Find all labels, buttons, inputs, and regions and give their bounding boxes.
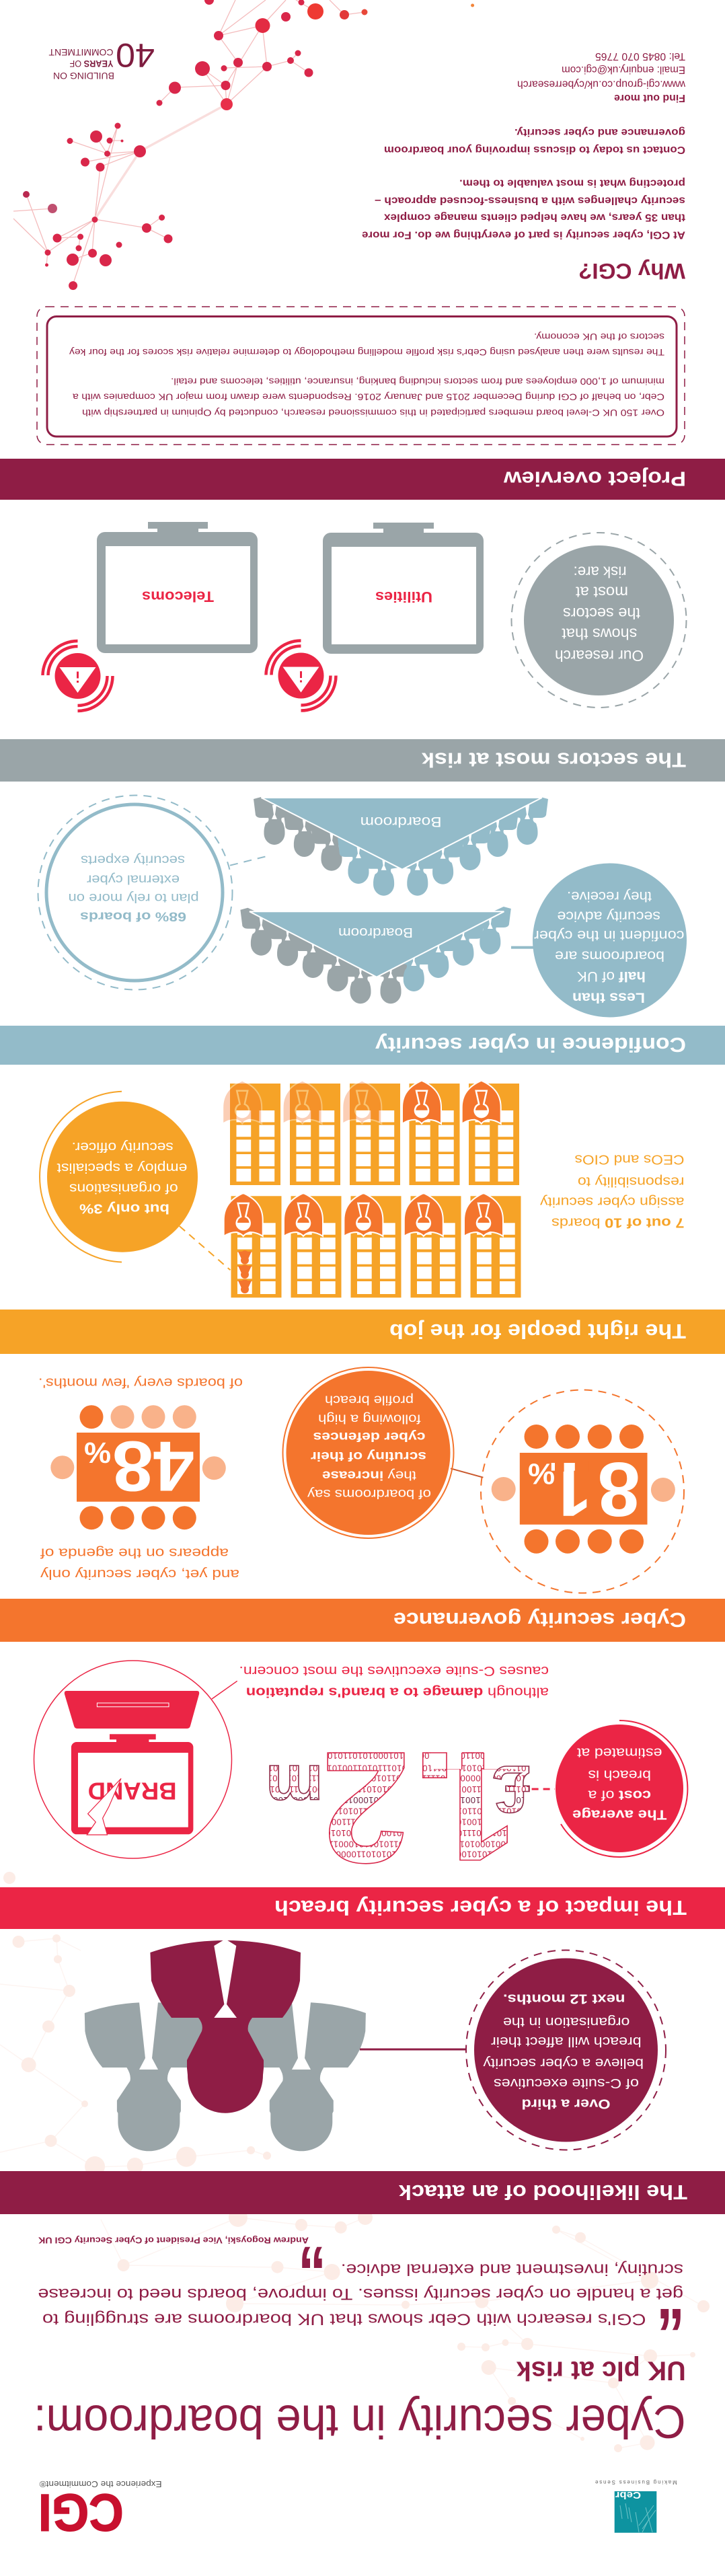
callout: but only 3%: but only 3%: [79, 1201, 169, 1216]
callout: over a third: Over a third: [522, 2096, 611, 2111]
panel: methodology box: sectors of the UK economy.: [534, 332, 664, 342]
contact details: Tel: 0845 070 7765: [595, 50, 685, 62]
stat: £1.2m binary figure: 2: [321, 1718, 410, 1896]
callout: boardrooms increase scrutiny: of boardrooms say: [307, 1486, 431, 1501]
stat: 81% boardroom table: 1: [549, 1446, 592, 1531]
stat: 81% boardroom table: %: [528, 1457, 555, 1490]
icon: boardroom table one: Boardroom: [360, 814, 442, 829]
icon: boardroom table two: Boardroom: [338, 925, 413, 940]
stat: 81% boardroom table: [481, 1390, 684, 1593]
callout: boardrooms increase scrutiny: they increase: [322, 1468, 416, 1482]
heading: why CGI: Why CGI?: [578, 259, 685, 283]
subtitle: UK plc at risk: [516, 2356, 686, 2386]
icon: brand monitor in circle: [34, 1661, 237, 1858]
40 years of commitment logo: 40: [116, 36, 155, 74]
panel: methodology box: Over 150 UK C-level board members participated in this commissioned research, conducted by Opinium in partnership with: [82, 408, 664, 418]
text: 7 out of 10 boards: responsibility to: [578, 1174, 685, 1189]
stat: £1.2m binary figure: 0110110101100101000111101010100100011100111010101011101000101010: [211, 1817, 531, 1827]
callout: but only 3%: security officer.: [72, 1139, 174, 1154]
stat: £1.2m binary figure: 1: [431, 1719, 518, 1893]
title: Cyber security in the boardroom:: [34, 2396, 686, 2448]
callout: average cost of a breach: [532, 1720, 687, 1857]
40 years of commitment logo: [48, 36, 155, 81]
section bar: the likelihood of an attack: The likelihood of an attack: [398, 2181, 687, 2204]
callout: average cost of a breach: cost of a: [587, 1787, 651, 1802]
logo: Cebr: [595, 2479, 677, 2533]
callout: 68% of boards: 68% of boards: [80, 909, 186, 923]
callout: 68% of boards: [38, 795, 270, 990]
callout: less than half: security advice: [557, 909, 660, 924]
section bar: project overview: [0, 459, 725, 500]
logo: Cebr: Cebr: [615, 2489, 641, 2501]
callout: less than half: Less than: [572, 990, 645, 1006]
callout: but only 3%: [40, 1092, 230, 1270]
stat: £1.2m binary figure: 0100110010000011001111000001101011100101001110101110101000111010: [212, 1773, 531, 1783]
why CGI text: security challenges with a business-focused approach –: [375, 195, 685, 206]
text: cyber security on the agenda: appears on the agenda of: [40, 1546, 229, 1560]
stat: £1.2m binary figure: £: [493, 1752, 530, 1827]
callout: over a third: believe a cyber security: [483, 2055, 644, 2070]
quote text: get a handle on cyber security issues. To improve, boards need to increase: [38, 2285, 683, 2303]
callout: but only 3%: of organisations: [69, 1181, 178, 1196]
callout: boardrooms increase scrutiny: following a high: [318, 1411, 421, 1425]
callout: sectors most at risk: the sectors: [563, 605, 640, 622]
why CGI text: protecting what is most valuable to them.: [459, 178, 685, 188]
text: 7 out of 10 boards: [540, 1152, 685, 1230]
text: damage to brand reputation: causes C-suite executives the most concern.: [239, 1663, 549, 1678]
icon: telecoms warning: [43, 641, 113, 711]
text: cyber security on the agenda: [38, 1375, 243, 1581]
icon: offices lower row: [224, 1193, 521, 1297]
panel: methodology box: The results were then analysed using Cebr's risk profile modelling methodology to determine relative risk scores for the four key: [69, 347, 664, 357]
callout: boardrooms increase scrutiny: scrutiny of their: [310, 1449, 426, 1463]
stat: £1.2m binary figure: 1000100100010101000000011011010110100011001111000111010010101011: [209, 1840, 531, 1850]
text: cyber security on the agenda: and yet, cyber security only: [40, 1566, 239, 1581]
stat: 48% boardroom table: %: [84, 1436, 111, 1469]
text: cyber security on the agenda: of boards every 'few months'.: [38, 1375, 243, 1390]
icon: offices upper row: [223, 1081, 519, 1185]
section bar: sectors most at risk: The sectors most at risk: [421, 748, 686, 772]
callout: less than half: they receive.: [567, 888, 652, 904]
text: 7 out of 10 boards: assign cyber security: [540, 1195, 685, 1209]
callout: sectors most at risk: [511, 533, 686, 708]
section bar: cyber security governance: Cyber security governance: [393, 1608, 686, 1632]
icon: telecoms monitor: Telecoms: [142, 588, 214, 605]
icon: boardroom table two: [240, 907, 511, 1003]
section bar: cyber security governance: [0, 1599, 725, 1642]
callout: less than half: boardrooms are: [555, 948, 664, 963]
stat: £1.2m binary figure: 1001110101011100101011100101000110010101010110100100011101011010: [210, 1828, 531, 1838]
section bar: the impact of a cyber security breach: [0, 1887, 725, 1929]
callout: sectors most at risk: risk are:: [574, 563, 627, 580]
section bar: project overview: Project overview: [503, 467, 686, 491]
why CGI text: [362, 126, 685, 241]
40 years of commitment logo: BUILDING ON: [53, 71, 114, 81]
callout: average cost of a breach: The average: [572, 1807, 666, 1822]
section bar: confidence in cyber security: [0, 1026, 725, 1065]
callout: but only 3%: employ a specialist: [56, 1160, 187, 1175]
callout: average cost of a breach: breach is: [588, 1768, 651, 1782]
why CGI text: than 35 years, we have helped clients manage complex: [384, 212, 685, 223]
callout: boardrooms increase scrutiny: [282, 1367, 483, 1538]
stat: £1.2m binary figure: [269, 1752, 530, 1864]
stat: 48% boardroom table: 48: [112, 1426, 194, 1505]
stat: £1.2m binary figure: 1011010111010110101110101010111010110010111010101110101011011010: [213, 1763, 531, 1773]
panel: methodology box: minimum of 1,000 employees and from sectors including banking, insurance, utilities, telecoms and retail.: [171, 377, 664, 386]
callout: 68% of boards: security experts: [81, 853, 185, 867]
icon: telecoms monitor: [97, 522, 258, 653]
stat: 48% boardroom table: [50, 1405, 226, 1529]
section bar: the right people for the job: The right people for the job: [389, 1320, 686, 1343]
quote text: [38, 2201, 685, 2345]
stat: £1.2m binary figure: 0100010010011010000100010101000101011010100010111000100010101000: [206, 1751, 531, 1761]
callout: less than half: [511, 864, 687, 1017]
contact details: Find out more: [614, 92, 685, 104]
quote text: scrutiny, investment and external advice.: [341, 2261, 683, 2279]
contact details: Email: enquiry.uk@cgi.com: [562, 64, 685, 75]
icon: three executives: [85, 1939, 366, 2151]
network graphic: [13, 0, 474, 290]
quote attribution: Andrew Rogoyski, Vice President of Cyber Security CGI UK: [38, 2236, 309, 2246]
panel: methodology box: Cebr, on behalf of CGI during December 2015 and January 2016. Respondents were drawn from major UK companies with a: [72, 391, 664, 402]
quote text: ”: [298, 2201, 326, 2283]
callout: less than half: half of UK: [577, 969, 646, 984]
section bar: the likelihood of an attack: [0, 2171, 725, 2214]
callout: average cost of a breach: estimated at: [576, 1745, 662, 1759]
callout: boardrooms increase scrutiny: cyber defences: [313, 1429, 425, 1443]
text: 7 out of 10 boards: 7 out of 10 boards: [551, 1215, 685, 1230]
logo: CGI: [38, 2479, 162, 2542]
40 years of commitment logo: COMMITMENT: [48, 47, 113, 58]
callout: over a third: next 12 months.: [503, 1992, 625, 2006]
40 years of commitment logo: YEARS OF: [70, 59, 113, 69]
logo: CGI: Experience the Commitment®: [39, 2479, 162, 2489]
logo: CGI: CGI: [38, 2483, 124, 2542]
callout: boardrooms increase scrutiny: profile breach: [325, 1393, 414, 1407]
stat: £1.2m binary figure: 1101011101011011010101110001000111101011100010001110101101000111: [214, 1807, 531, 1817]
callout: sectors most at risk: Our research: [555, 647, 644, 665]
contact details: www.cgi-group.co.uk/cyberresearch: [517, 78, 686, 90]
text: damage to brand reputation: [239, 1663, 549, 1699]
callout: 68% of boards: plan to rely more on: [69, 891, 199, 905]
callout: 68% of boards: external cyber: [86, 872, 180, 886]
text: damage to brand reputation: although damage to a brand's reputation: [246, 1684, 549, 1699]
stat: £1.2m binary figure: .: [412, 1717, 458, 1905]
stat: 81% boardroom table: 8: [598, 1446, 640, 1531]
contact details: [517, 50, 686, 104]
section bar: confidence in cyber security: Confidence in cyber security: [375, 1033, 686, 1057]
callout: less than half: confident in the cyber: [534, 927, 685, 943]
stat: £1.2m binary figure: 0101000101100100100011010101010100011101010100011000111010100010: [207, 1795, 531, 1805]
why CGI text: governance and cyber security.: [514, 126, 685, 138]
callout: over a third: of C-suite executives: [494, 2076, 639, 2090]
section bar: the right people for the job: [0, 1310, 725, 1354]
callout: over a third: organisation in the: [503, 2014, 629, 2029]
quote text: CGI's research with Cebr shows that UK boardrooms are struggling to: [42, 2310, 646, 2328]
stat: £1.2m binary figure: 1011101010110010110001111010010101101011100011111110101011011000: [215, 1784, 531, 1794]
text: 7 out of 10 boards: CEOs and CIOs: [574, 1152, 685, 1167]
why CGI text: At CGI, cyber security is part of everything we do. For more: [362, 229, 685, 241]
section bar: the impact of a cyber security breach: The impact of a cyber security breach: [274, 1896, 687, 1920]
icon: utilities monitor: Utilities: [375, 589, 432, 605]
panel: methodology box: [37, 307, 685, 445]
icon: utilities monitor: [323, 523, 484, 654]
callout: over a third: breach will affect their: [491, 2034, 642, 2049]
stat: £1.2m binary figure: m: [266, 1751, 323, 1823]
callout: over a third: [360, 1950, 666, 2150]
section bar: sectors most at risk: [0, 739, 725, 782]
icon: brand monitor in circle: BRAND: [88, 1778, 177, 1805]
quote text: “: [656, 2263, 685, 2345]
callout: sectors most at risk: shows that: [562, 625, 637, 642]
callout: sectors most at risk: most at: [575, 584, 628, 601]
why CGI text: Contact us today to discuss improving your boardroom: [384, 144, 685, 155]
icon: boardroom table one: [254, 797, 548, 896]
icon: utilities warning: [266, 640, 336, 710]
logo: Cebr: Making Business Sense: [595, 2479, 677, 2485]
stat: £1.2m binary figure: 0101110110101000101010110111010101100001100101101010111010110011: [211, 1850, 531, 1860]
background watermark network: [0, 1872, 710, 2452]
